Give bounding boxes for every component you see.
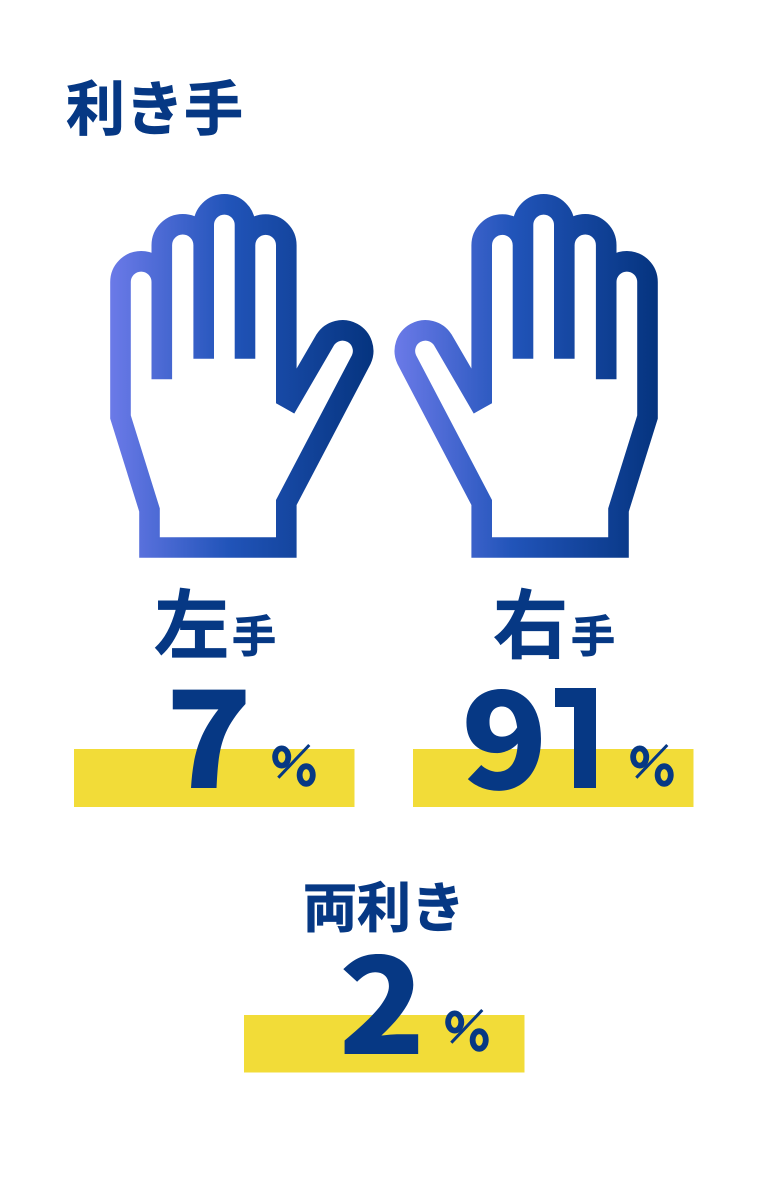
percent sign: both: % <box>443 992 487 1062</box>
stat: left hand 7% <box>74 588 354 807</box>
percent sign: left: % <box>270 727 314 797</box>
percent sign: right: % <box>628 727 672 797</box>
percent sign: both <box>445 1009 489 1052</box>
icon: right hand <box>405 204 648 548</box>
value: 91: 1 <box>543 635 630 826</box>
percent sign: right <box>630 744 674 787</box>
icon: left hand <box>120 204 363 548</box>
stat: both hands 2% <box>244 880 524 1072</box>
value: 91 <box>466 688 596 791</box>
label: ambidextrous: 両利き <box>303 864 465 943</box>
stat: right hand 91% <box>413 588 694 807</box>
label: left hand: 左手 <box>154 565 276 674</box>
highlight bar: left <box>74 749 354 807</box>
value: 91: 9 <box>461 636 548 827</box>
highlight bar: right <box>413 749 694 807</box>
title: 利き手 <box>66 62 243 147</box>
label: right hand: 右手 <box>493 565 615 674</box>
value: 7: 7 <box>166 635 252 826</box>
value: 2: 2 <box>339 901 425 1092</box>
highlight bar: both <box>244 1015 524 1072</box>
percent sign: left <box>272 744 316 787</box>
